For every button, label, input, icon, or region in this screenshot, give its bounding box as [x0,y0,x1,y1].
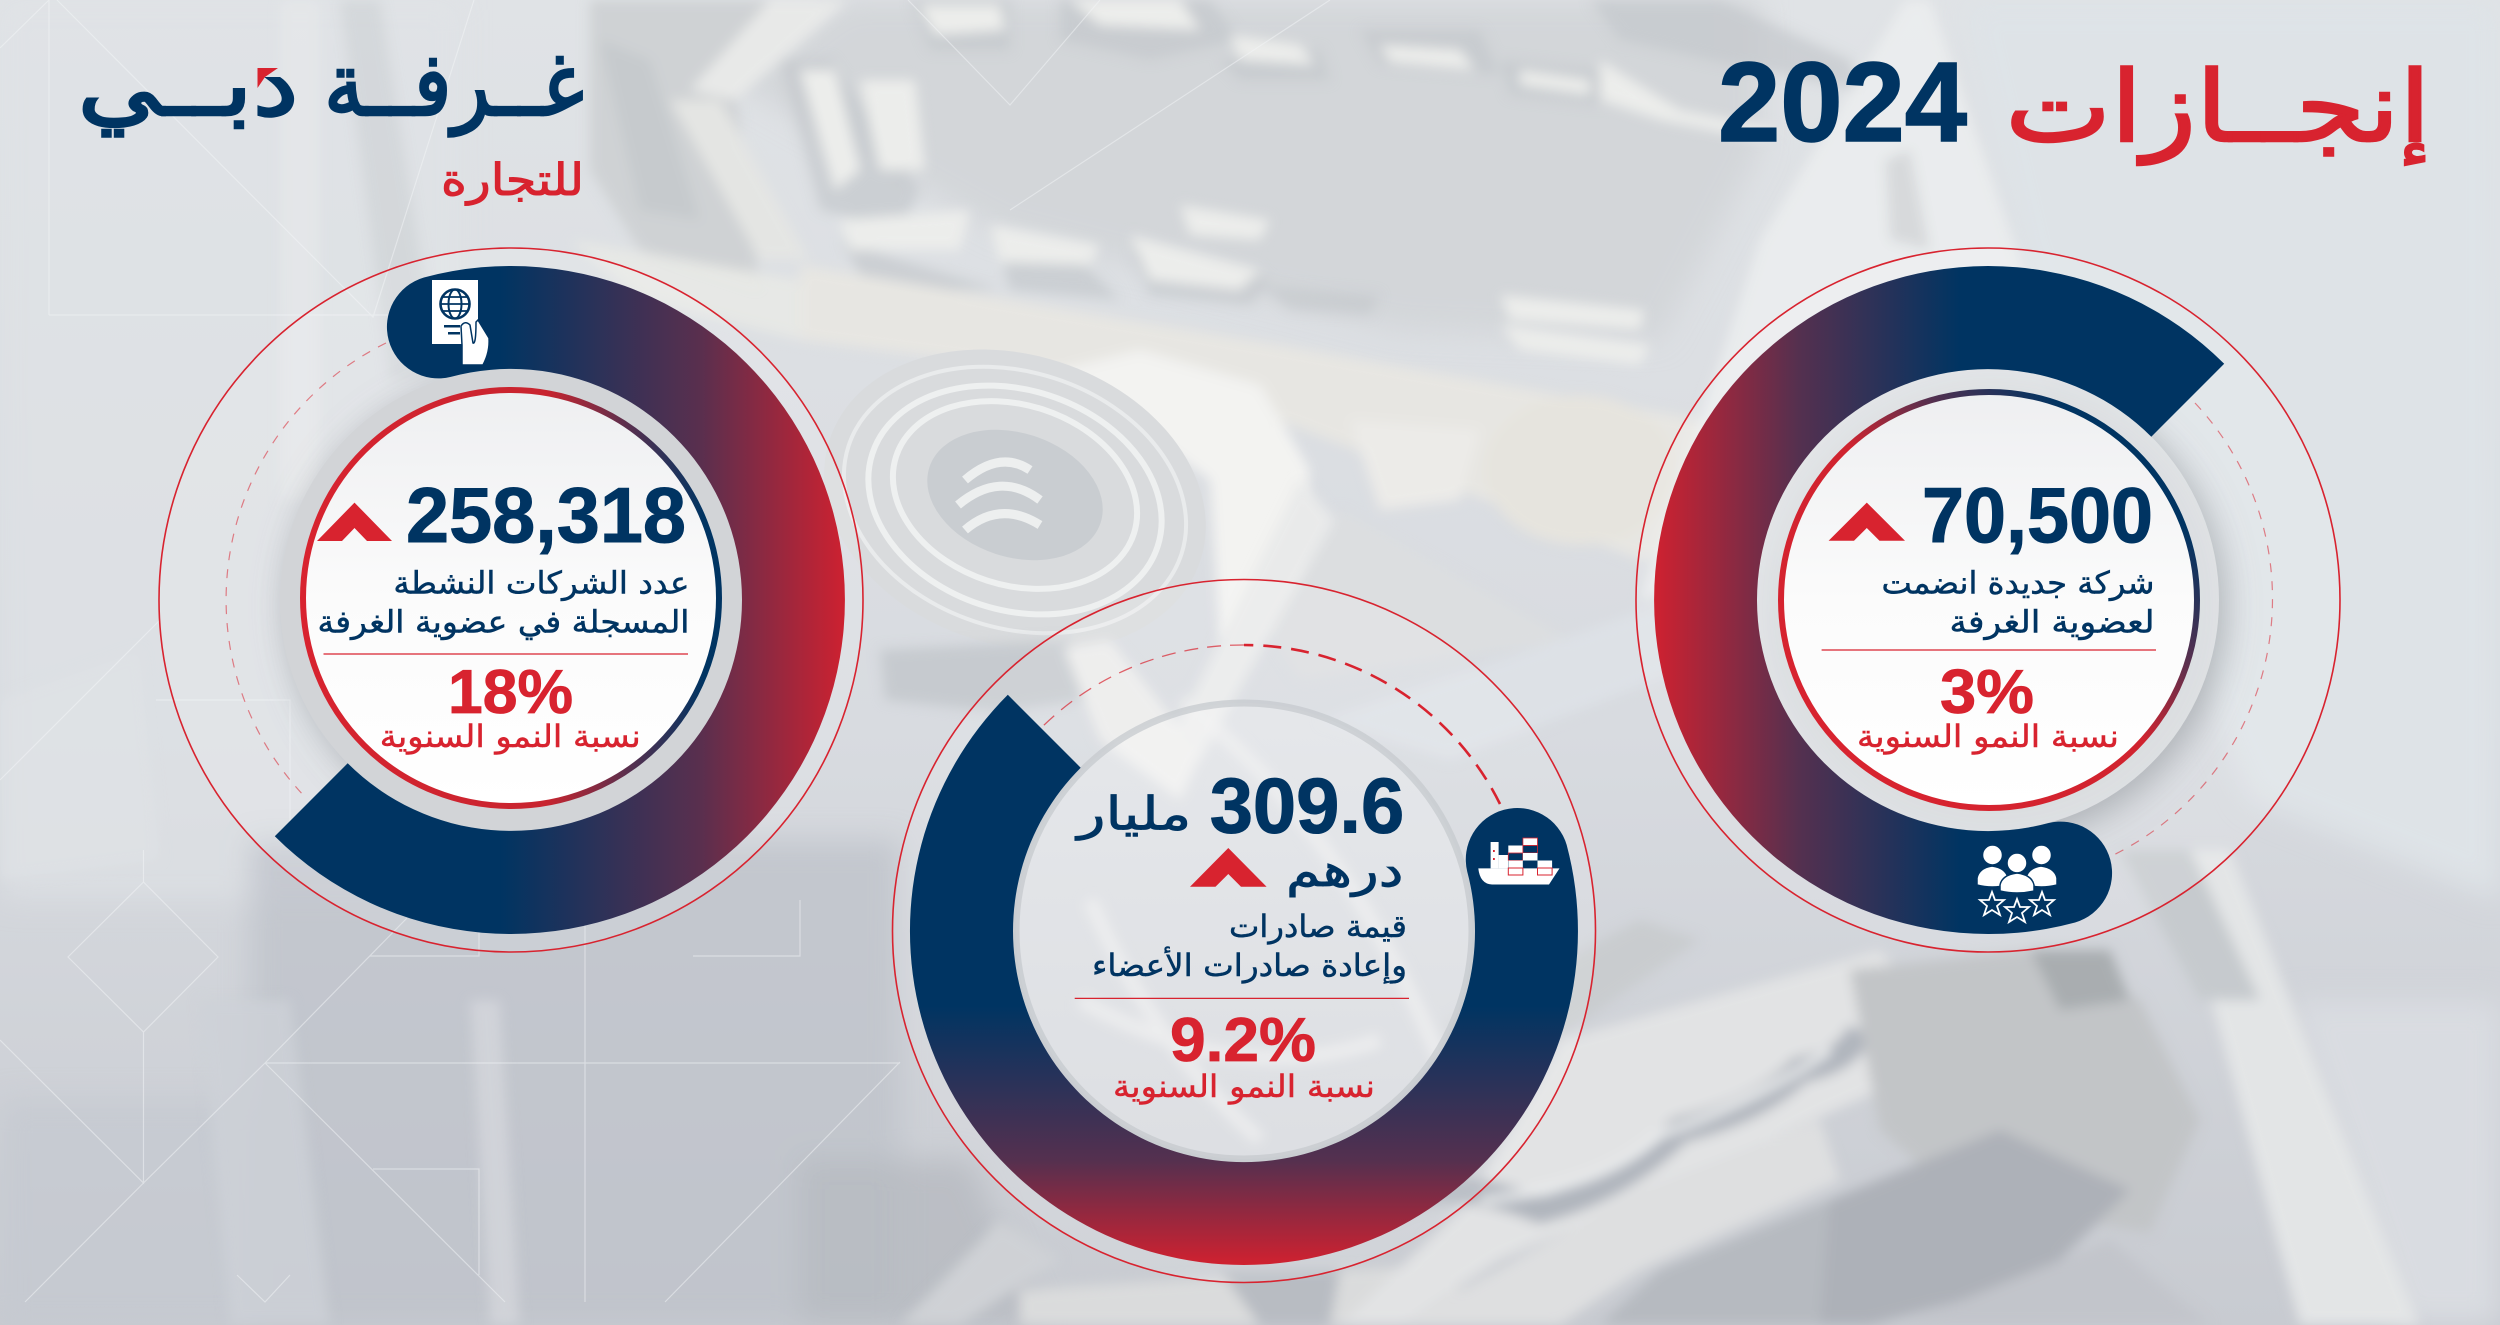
label [1882,566,2154,640]
title [1718,39,2430,166]
dashed orbit strong [1244,645,1500,804]
wavy garden [1380,1030,1860,1210]
unit billion: مليار [1075,786,1191,840]
label [1092,909,1407,984]
label: لعضوية الغرفة [1950,604,2154,640]
left stripes [0,650,160,880]
inner disk [1781,392,2197,808]
label: وإعادة صادرات الأعضاء [1092,946,1407,984]
label: المسجلة في عضوية الغرفة [318,604,690,640]
bottom centre [1020,1265,1500,1325]
icon: container ship [1478,838,1560,884]
growth value: 3% [1940,658,2034,727]
decorative thin lines [0,0,1330,1302]
lower promenade [1400,1120,1840,1325]
growth value: 9.2% [1170,1006,1316,1075]
growth label: نسبة النمو السنوية [380,719,641,755]
logo word commerce: للتجارة [441,155,584,206]
label: شركة جديدة انضمت [1882,566,2154,602]
icon: passport and hand [432,280,489,365]
upper centre dark and road behind export panel [880,640,1085,712]
logo word ghurfa: غــرفــة [324,33,584,137]
growth label: نسبة النمو السنوية [1113,1069,1375,1105]
dashed orbit [226,343,386,798]
bridge pylon [1640,0,2090,600]
arrow up [1190,848,1267,887]
ring [275,266,845,934]
arrow up [317,503,392,541]
panel: new member companies [1636,248,2340,952]
label [318,566,690,640]
dashed orbit thin [1041,645,1244,728]
title word: إنجــازات [2006,51,2430,166]
logo word dubai: دبــي [78,33,298,137]
beige forecourt [1485,395,1675,545]
label: قيمة صادرات [1229,909,1407,945]
promenade [1340,950,1920,1325]
ring [910,695,1578,1265]
title year: 2024 [1718,39,1967,165]
value: 258,318 [406,471,686,559]
growth label: نسبة النمو السنوية [1857,719,2119,755]
shore band [800,265,1780,560]
overpass [1160,480,1335,760]
panel: active member companies [159,248,863,952]
label: عدد الشركات النشطة [393,566,689,602]
icon: members with stars [1977,845,2057,922]
panel: export value [892,580,1596,1282]
arrow up [1829,503,1905,541]
value: 309.6 [1210,762,1404,850]
growth value: 18% [448,658,573,727]
stadium [785,302,1245,698]
unit dirham: درهم [1286,843,1403,897]
value: 70,500 [1922,471,2153,559]
dashed orbit [2114,403,2272,855]
white roof [1060,350,1310,640]
road and harbour left [590,0,770,290]
boats moored at quay [780,0,1860,305]
tree cluster and cars [1850,950,2200,1233]
logo: Dubai Chamber of Commerce [78,33,584,206]
logo red accent [258,68,278,88]
inner disk [303,390,719,806]
solar roof [1260,510,1570,680]
ring [1654,266,2224,934]
right strip [2170,850,2420,1325]
